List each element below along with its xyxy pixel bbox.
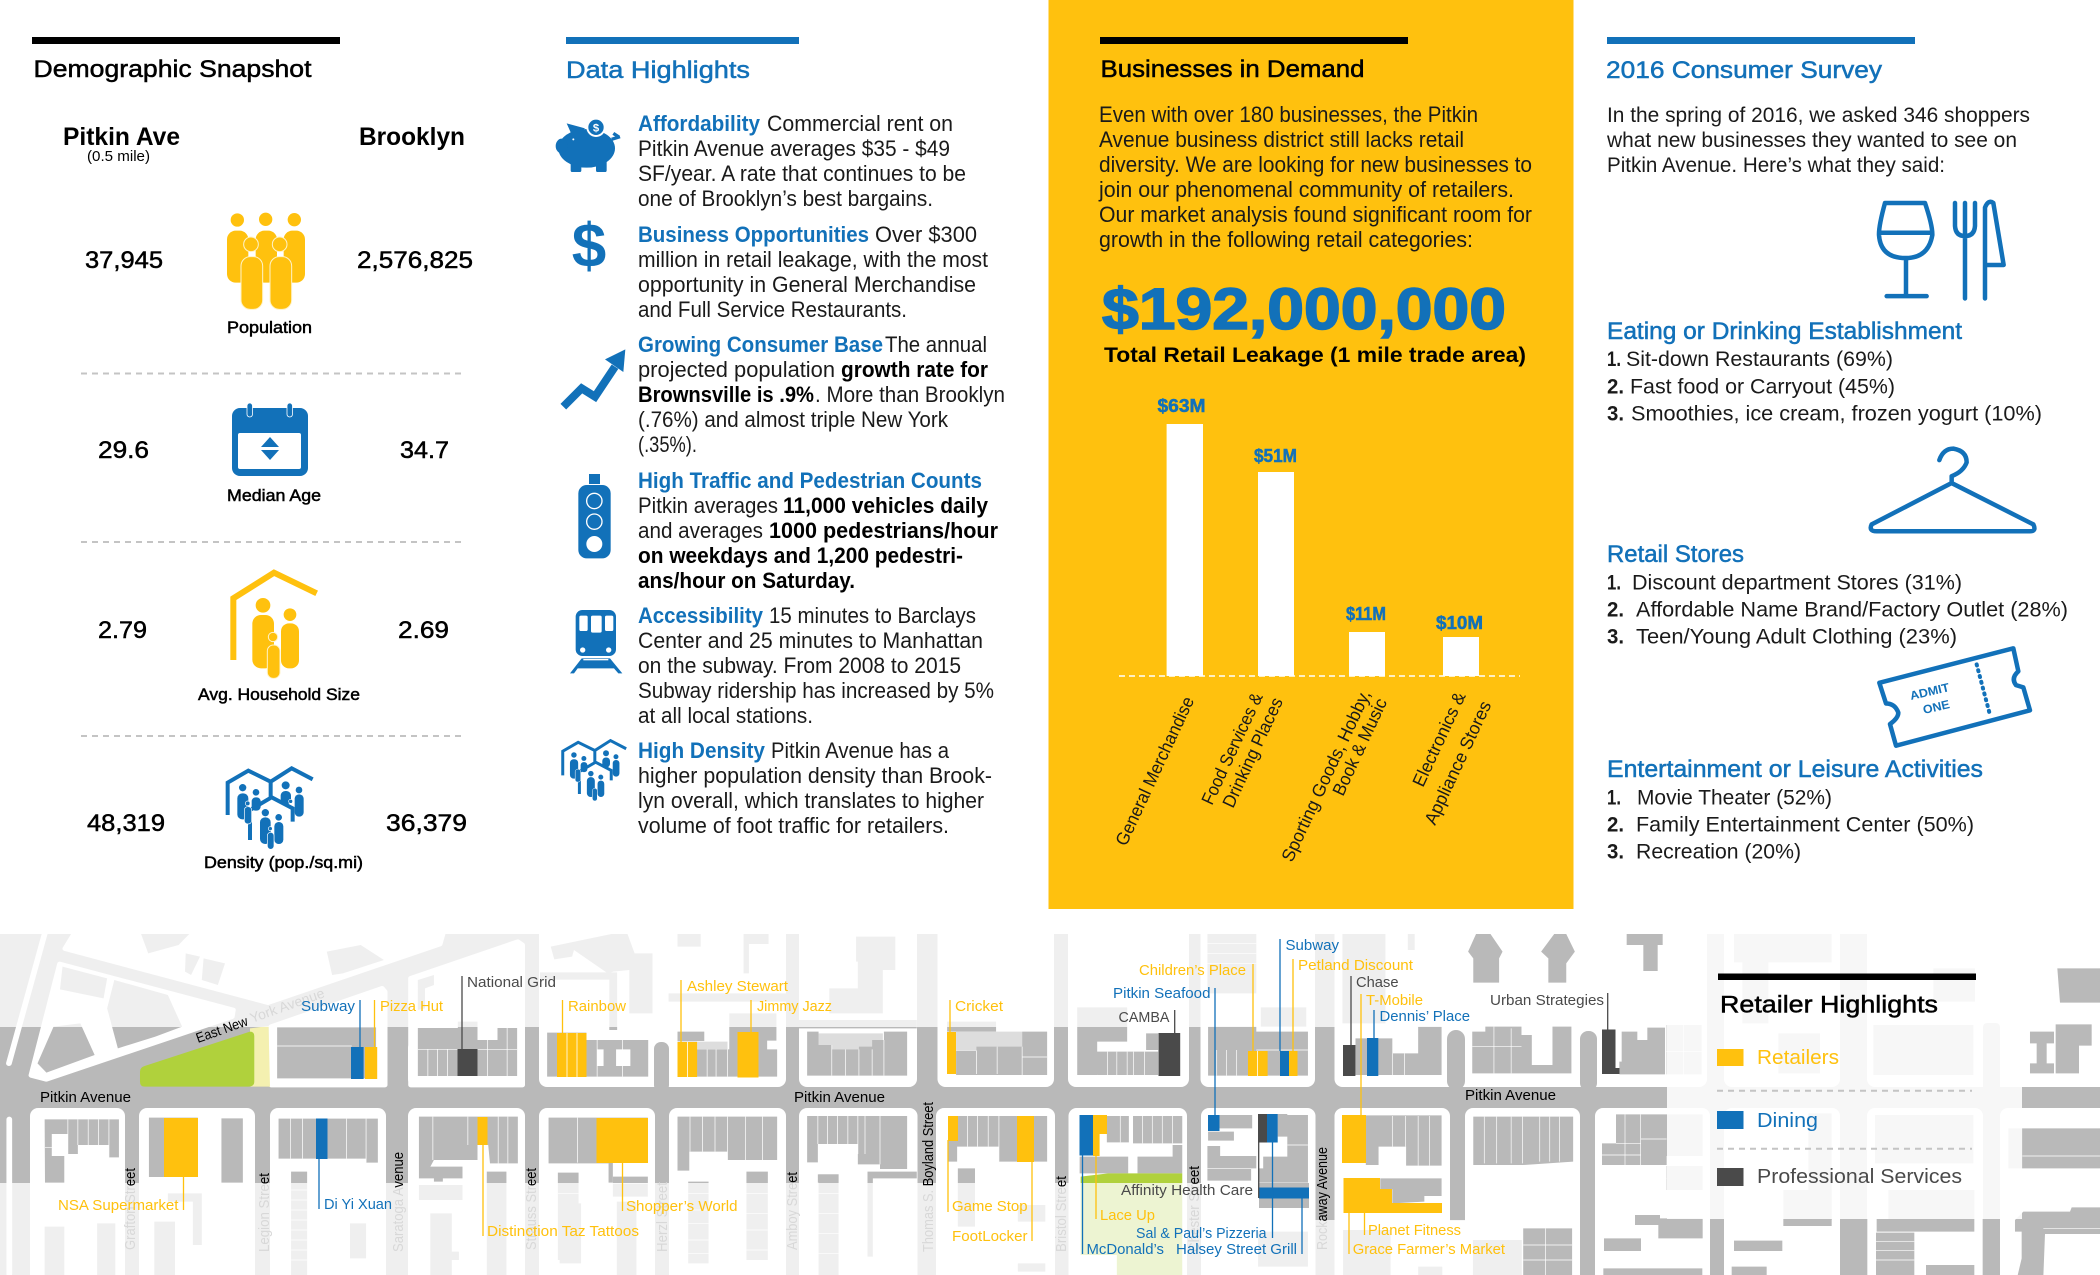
text: survey intro: what new businesses they wanted to see on (1606, 129, 2017, 152)
icon: hanger (1871, 449, 2034, 531)
text: high density: lyn overall, which translates to higher (638, 788, 984, 813)
text: high traffic: High Traffic and Pedestrian Counts (638, 468, 982, 493)
map: retailer map of Pitkin Avenue (0, 925, 2100, 1275)
list: eating or drinking: Eating or Drinking Establishment (1607, 318, 1962, 345)
label: population: Population (227, 319, 312, 337)
column head: Pitkin Ave: Pitkin Ave (63, 123, 180, 151)
text: accessibility: Center and 25 minutes to Manhattan (638, 628, 983, 653)
retailer labels: Grace Farmer’s Market (1353, 1241, 1506, 1258)
retailer labels: Subway (1286, 937, 1339, 954)
retailer labels: Game Stop (952, 1198, 1028, 1215)
bar chart: retail leakage: Electronics & (1408, 689, 1470, 790)
text: accessibility: Accessibility (638, 603, 764, 628)
list: entertainment: Entertainment or Leisure Activities (1607, 756, 1983, 783)
value: household Pitkin: 2.79 (98, 617, 147, 644)
street name labels: Grafton Street (122, 1167, 139, 1250)
retailer labels: Lace Up (1100, 1207, 1155, 1224)
text: intro paragraph: join our phenomenal community of retailers. (1098, 177, 1514, 202)
icon: piggy bank: $ (593, 122, 600, 134)
street blocks far east (1602, 934, 2100, 1275)
list: retail stores (1607, 541, 2068, 648)
text: survey intro: Pitkin Avenue. Here’s what they said: (1607, 154, 1945, 177)
value: density Brooklyn: 36,379 (386, 810, 467, 837)
text: intro paragraph: diversity. We are looking for new businesses to (1099, 152, 1532, 177)
list: eating or drinking: 1. (1607, 348, 1621, 371)
street name labels: Chester Street (1186, 1165, 1203, 1252)
list: entertainment: 3. (1607, 840, 1624, 864)
text: business opportunities: million in retail leakage, with the most (638, 247, 988, 272)
bar chart: retail leakage: $10M (1436, 613, 1483, 633)
bar chart: retail leakage: Book & Music (1328, 695, 1391, 799)
icon: piggy bank (556, 118, 620, 172)
text: business opportunities: opportunity in General Merchandise (638, 272, 976, 297)
heading: demographic snapshot: Demographic Snapshot (34, 56, 312, 83)
text: growing consumer base: (.76%) and almost triple New York (638, 407, 949, 432)
heading: consumer survey: 2016 Consumer Survey (1606, 57, 1882, 84)
text: intro paragraph: Even with over 180 businesses, the Pitkin (1099, 102, 1478, 127)
text: high traffic: 1000 pedestrians/hour (769, 518, 998, 543)
icon: admit one ticket: ADMIT (1909, 680, 1951, 703)
icon: calendar (232, 403, 308, 476)
list: retail stores: Affordable Name Brand/Factory Outlet (28%) (1636, 598, 2068, 622)
retailer labels: Ashley Stewart (687, 978, 789, 995)
value: household Brooklyn: 2.69 (398, 617, 449, 644)
dark block below the band at Halsey (1259, 1183, 1309, 1208)
text: accessibility: on the subway. From 2008 to 2015 (638, 653, 961, 678)
text: high traffic: 11,000 vehicles daily (783, 493, 989, 518)
text: intro paragraph (1098, 102, 1532, 252)
street name labels: East New (194, 1012, 251, 1046)
text: growing consumer base: (.35%). (638, 432, 697, 457)
street name labels: Herzl Street (654, 1181, 671, 1252)
retailer labels: Subway (301, 998, 355, 1015)
text: high density: higher population density than Brook- (638, 763, 992, 788)
white end of side street (1450, 1220, 1465, 1275)
list: retail stores: Retail Stores (1607, 541, 1744, 568)
column head: Brooklyn: Brooklyn (359, 123, 465, 151)
retailer labels: National Grid (467, 974, 556, 991)
fade overlay above and below the band (0, 934, 1522, 1275)
text: high traffic: ans/hour on Saturday. (638, 568, 855, 593)
street name labels: Strauss Street (523, 1167, 540, 1250)
icon: growth arrow (563, 349, 625, 407)
text: growing consumer base (638, 332, 1005, 457)
icon: admit one ticket (1879, 648, 2030, 746)
retailer labels: Sal & Paul’s Pizzeria (1136, 1225, 1267, 1242)
text: high density: Pitkin Avenue has a (771, 738, 950, 763)
text: business opportunities (638, 222, 988, 322)
text: growing consumer base: Growing Consumer Base (638, 332, 883, 357)
retailer labels: Dennis’ Place (1380, 1008, 1470, 1025)
retailer labels: Affinity Health Care (1121, 1182, 1253, 1199)
street name labels: Rockaway Avenue (1314, 1147, 1331, 1250)
street name labels: Pitkin Avenue (1465, 1087, 1556, 1104)
icon: density houses (228, 768, 313, 849)
legend label: professional services: Professional Services (1757, 1166, 1962, 1188)
list: eating or drinking: 3. (1607, 402, 1624, 426)
retailer labels: NSA Supermarket (58, 1197, 179, 1214)
retailer labels: Cricket (955, 998, 1004, 1015)
tenant blocks: retailers (164, 1032, 1442, 1213)
text: survey intro: In the spring of 2016, we asked 346 shoppers (1607, 104, 2030, 127)
text: affordability: Commercial rent on (767, 111, 953, 136)
text: growing consumer base: Brownsville is .9% (638, 382, 814, 407)
street blocks central (540, 934, 1047, 1275)
list: entertainment: 2. (1607, 814, 1624, 836)
list: eating or drinking (1607, 318, 2042, 426)
leader lines (184, 939, 1608, 1254)
retailer labels: Urban Strategies (1490, 992, 1604, 1009)
text: high density (638, 738, 992, 838)
icon: subway train (570, 610, 622, 673)
street name labels: Bristol Street (1053, 1175, 1070, 1252)
text: affordability: Pitkin Avenue averages $35 - $49 (638, 136, 950, 161)
heading: businesses in demand: Businesses in Demand (1100, 56, 1364, 83)
bar chart: retail leakage: Drinking Places (1218, 694, 1287, 811)
street name labels: Thomas S. Boyland Street (920, 1101, 937, 1252)
legend heading: Retailer Highlights (1720, 992, 1938, 1018)
bar chart: retail leakage: Food Services & (1197, 690, 1267, 808)
retailer labels: Rainbow (568, 998, 626, 1015)
icon: population people (227, 213, 305, 309)
text: accessibility: Subway ridership has increased by 5% (638, 678, 994, 703)
text: business opportunities: and Full Service Restaurants. (638, 297, 907, 322)
icon: dollar sign: $ (572, 212, 606, 281)
text: high traffic: and averages (638, 518, 763, 543)
retailer labels: Chase (1356, 974, 1398, 991)
text: survey intro (1606, 104, 2030, 177)
panel: demographic snapshot (32, 37, 473, 872)
retailer labels: Halsey Street Grill (1176, 1241, 1297, 1258)
tenant blocks: dining (316, 1038, 1378, 1198)
icon: household (233, 573, 317, 678)
text: high traffic: Pitkin averages (638, 493, 778, 518)
text: business opportunities: Business Opportunities (638, 222, 869, 247)
list: retail stores: Teen/Young Adult Clothing (23%) (1636, 626, 1957, 648)
retailer labels: CAMBA (1118, 1009, 1170, 1026)
label: household size: Avg. Household Size (198, 686, 360, 704)
retailer labels: Planet Fitness (1368, 1222, 1461, 1239)
street name labels: York Avenue (248, 985, 327, 1026)
icon: density houses small (563, 741, 626, 801)
text: high traffic: on weekdays and 1,200 pedestri- (638, 543, 963, 568)
retailer labels: Children’s Place (1139, 962, 1246, 979)
text: affordability: one of Brooklyn’s best bargains. (638, 186, 933, 211)
text: accessibility: at all local stations. (638, 703, 813, 728)
text: accessibility (638, 603, 994, 728)
legend label: dining: Dining (1757, 1110, 1818, 1132)
subtitle: total retail leakage: Total Retail Leakage (1 mile trade area) (1104, 344, 1526, 367)
icon: admit one ticket: ONE (1922, 697, 1951, 717)
label: median age: Median Age (227, 487, 321, 505)
value: population Brooklyn: 2,576,825 (357, 247, 473, 274)
list: eating or drinking: Fast food or Carryout (45%) (1630, 376, 1895, 398)
retailer labels: McDonald’s (1086, 1241, 1164, 1258)
retailer labels (58, 937, 1604, 1258)
text: growing consumer base: . More than Brooklyn (815, 382, 1005, 407)
text: affordability (638, 111, 966, 211)
text: growing consumer base: The annual (885, 332, 987, 357)
street name labels: Legion Street (256, 1172, 273, 1252)
bar chart: retail leakage: $63M (1158, 396, 1206, 416)
street name labels: Pitkin Avenue (794, 1089, 885, 1106)
retailer labels: Di Yi Xuan (324, 1196, 392, 1213)
legend swatch: professional services (1717, 1168, 1744, 1186)
label: density: Density (pop./sq.mi) (204, 854, 363, 872)
list: entertainment: Family Entertainment Center (50%) (1636, 814, 1974, 836)
text: business opportunities: Over $300 (875, 222, 977, 247)
list: entertainment: Recreation (20%) (1636, 840, 1801, 864)
list: entertainment: Movie Theater (52%) (1637, 786, 1832, 810)
text: growing consumer base: growth rate for (841, 357, 988, 382)
tenant blocks: professional services (458, 1030, 1620, 1142)
text: high traffic (638, 468, 998, 593)
bar chart: retail leakage: Sporting Goods, Hobby, (1277, 687, 1375, 865)
retailer labels: Petland Discount (1298, 957, 1414, 974)
list: retail stores: 1. (1607, 572, 1621, 594)
bar chart: retail leakage: $11M (1346, 604, 1386, 624)
bar chart: retail leakage: $51M (1254, 446, 1297, 466)
value: density Pitkin: 48,319 (87, 810, 165, 837)
street name labels: Pitkin Avenue (40, 1089, 131, 1106)
retailer labels: Shopper’s World (626, 1198, 738, 1215)
icon: wine glass and cutlery (1879, 202, 2004, 298)
heading: data highlights: Data Highlights (566, 57, 750, 84)
retailer labels: FootLocker (952, 1228, 1028, 1245)
legend: retailer highlights (1717, 974, 1976, 1188)
list: eating or drinking: Sit-down Restaurants (69%) (1626, 348, 1893, 371)
text: affordability: SF/year. A rate that continues to be (638, 161, 966, 186)
panel: businesses in demand (1048, 0, 1574, 909)
text: growing consumer base: projected population (638, 357, 835, 382)
retailer labels: Pitkin Seafood (1113, 985, 1210, 1002)
retailer labels: Distinction Taz Tattoos (487, 1223, 639, 1240)
icon: traffic light (578, 474, 611, 558)
list: entertainment: 1. (1607, 786, 1621, 810)
value: age Pitkin: 29.6 (98, 437, 149, 464)
street blocks west (6, 930, 522, 1275)
bar chart: retail leakage (1111, 396, 1520, 865)
text: affordability: Affordability (638, 111, 761, 136)
text: intro paragraph: growth in the following retail categories: (1099, 227, 1473, 252)
bar chart: retail leakage: Appliance Stores (1420, 698, 1495, 828)
value: age Brooklyn: 34.7 (400, 437, 449, 464)
panel: consumer survey (1606, 37, 2068, 864)
list: retail stores: 3. (1607, 626, 1624, 648)
street name labels (40, 985, 1556, 1252)
text: high density: volume of foot traffic for retailers. (638, 813, 949, 838)
fade overlay behind legend (1667, 934, 2022, 1219)
retailer labels: Pizza Hut (380, 998, 444, 1015)
list: retail stores: Discount department Stores (31%) (1632, 572, 1962, 594)
text: intro paragraph: Our market analysis found significant room for (1099, 202, 1532, 227)
list: eating or drinking: 2. (1607, 376, 1624, 398)
legend swatch: retailers (1717, 1049, 1744, 1066)
street name labels: Amboy Street (784, 1171, 801, 1250)
retailer labels: T-Mobile (1366, 992, 1423, 1009)
list: retail stores: 2. (1607, 598, 1624, 622)
legend label: retailers: Retailers (1757, 1047, 1839, 1069)
retailer labels: Jimmy Jazz (757, 998, 832, 1015)
list: entertainment (1607, 756, 1983, 864)
text: intro paragraph: Avenue business district still lacks retail (1099, 127, 1464, 152)
bar chart: retail leakage: General Merchandise (1111, 693, 1198, 849)
column note: (0.5 mile) (87, 148, 150, 165)
text: accessibility: 15 minutes to Barclays (769, 603, 976, 628)
list: eating or drinking: Smoothies, ice cream, frozen yogurt (10%) (1631, 402, 2042, 426)
panel: data highlights (556, 37, 1005, 838)
big number: total leakage: $192,000,000 (1102, 277, 1506, 342)
value: population Pitkin: 37,945 (85, 247, 163, 274)
street name labels: Saratoga Avenue (390, 1152, 407, 1252)
street blocks east (1077, 934, 1575, 1275)
legend swatch: dining (1717, 1111, 1744, 1129)
text: high density: High Density (638, 738, 766, 763)
